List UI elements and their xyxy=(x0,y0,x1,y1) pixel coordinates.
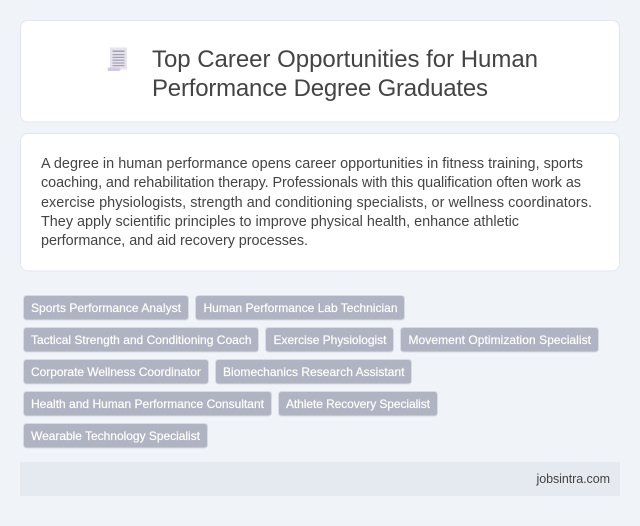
description text: A degree in human performance opens career opportunities in fitness training, sports xyxy=(41,156,583,172)
tag: Human Performance Lab Technician: Human Performance Lab Technician xyxy=(204,301,398,315)
tag: Biomechanics Research Assistant xyxy=(216,360,412,384)
description text: They apply scientific principles to improve physical health, enhance athletic xyxy=(41,214,519,230)
tag: Health and Human Performance Consultant xyxy=(24,392,272,416)
tag: Corporate Wellness Coordinator: Corporate Wellness Coordinator xyxy=(31,365,201,379)
title: Performance Degree Graduates xyxy=(152,75,488,102)
footer text: jobsintra.com xyxy=(536,472,610,486)
tag: Human Performance Lab Technician xyxy=(196,296,404,320)
tag: Health and Human Performance Consultant: Health and Human Performance Consultant xyxy=(31,397,265,411)
tag: Athlete Recovery Specialist: Athlete Recovery Specialist xyxy=(286,397,431,411)
description text xyxy=(41,156,592,249)
panel: description xyxy=(20,134,620,271)
tag: Exercise Physiologist xyxy=(266,328,394,352)
description text: exercise physiologists, strength and conditioning specialists, or wellness coordinators. xyxy=(41,195,592,211)
tag: Corporate Wellness Coordinator xyxy=(24,360,208,384)
tag: Wearable Technology Specialist: Wearable Technology Specialist xyxy=(31,429,201,443)
title: Top Career Opportunities for Human xyxy=(152,46,538,73)
description text: coaching, and rehabilitation therapy. Professionals with this qualification often work as xyxy=(41,175,581,191)
tag: Biomechanics Research Assistant: Biomechanics Research Assistant xyxy=(223,365,405,379)
tag: Tactical Strength and Conditioning Coach: Tactical Strength and Conditioning Coach xyxy=(31,333,252,347)
tag: Exercise Physiologist: Exercise Physiologist xyxy=(274,333,387,347)
tag: Wearable Technology Specialist xyxy=(24,424,208,448)
description text: performance, and aid recovery processes. xyxy=(41,233,308,249)
tag: Tactical Strength and Conditioning Coach xyxy=(24,328,258,352)
panel: header xyxy=(20,20,620,122)
title xyxy=(152,46,538,102)
tag: Athlete Recovery Specialist xyxy=(278,392,438,416)
tag: Movement Optimization Specialist xyxy=(400,328,598,352)
tag: Sports Performance Analyst: Sports Performance Analyst xyxy=(31,301,182,315)
tag: Movement Optimization Specialist: Movement Optimization Specialist xyxy=(408,333,592,347)
icon: document scroll xyxy=(108,48,127,71)
tag list xyxy=(24,296,598,448)
tag: Sports Performance Analyst xyxy=(24,296,188,320)
footer xyxy=(20,462,620,496)
